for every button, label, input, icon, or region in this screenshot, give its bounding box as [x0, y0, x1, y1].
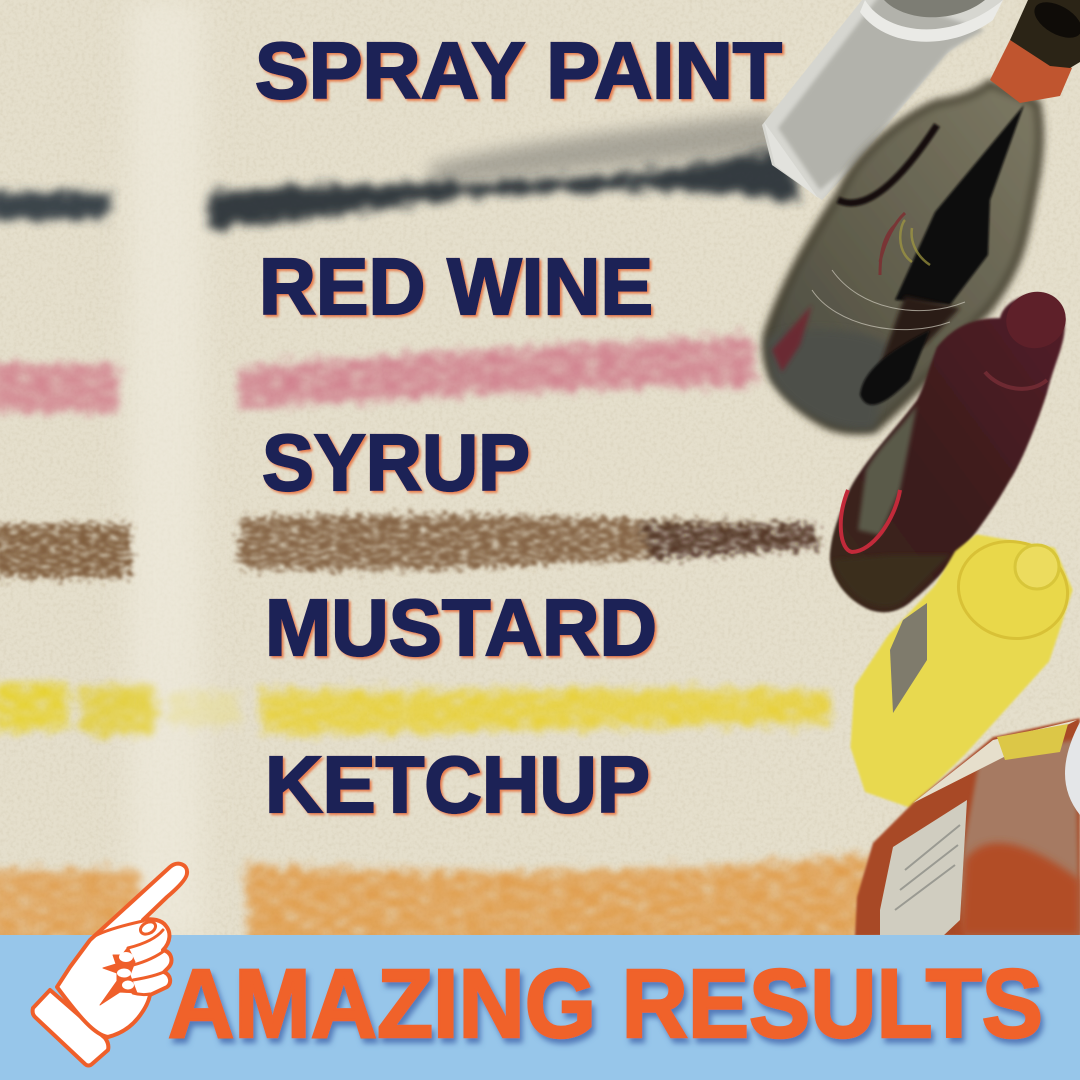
stain: ketchup: [0, 855, 870, 955]
stain: mustard: [0, 684, 830, 734]
stain: syrup: [0, 515, 818, 578]
ketchup bottle: [855, 718, 1080, 936]
red wine bottle: [766, 0, 1080, 431]
heading: ketchup: KETCHUP: [265, 740, 650, 829]
stain: red wine: [0, 336, 755, 412]
heading: red wine: RED WINE: [259, 242, 653, 331]
icon: pointing hand: [33, 864, 187, 1066]
spray paint can: [762, 0, 1003, 200]
banner text: amazing results: AMAZING RESULTS: [168, 949, 1043, 1058]
heading: spray paint: SPRAY PAINT: [255, 26, 782, 115]
banner: [0, 935, 1080, 1080]
heading: mustard: MUSTARD: [265, 583, 657, 672]
heading: syrup: SYRUP: [262, 418, 530, 507]
syrup bottle: [830, 283, 1074, 612]
mustard bottle: [853, 529, 1079, 805]
stain: spray paint: [0, 112, 800, 228]
